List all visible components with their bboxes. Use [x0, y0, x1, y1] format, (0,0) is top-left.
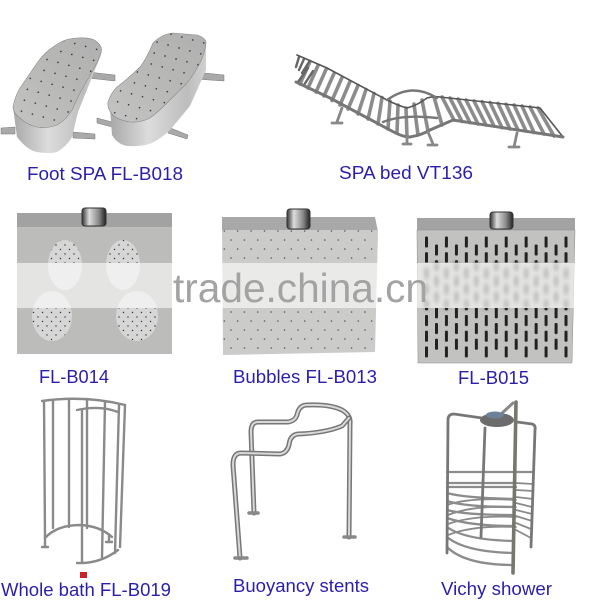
- front rings: [447, 472, 533, 565]
- panel: box FL-B015: [417, 212, 575, 363]
- shower head: [500, 403, 513, 415]
- perforated foot ovals: [32, 240, 158, 341]
- pipe: [287, 209, 310, 229]
- bed lower rail: [296, 82, 563, 137]
- panel: foot SPA: [1, 33, 224, 153]
- label: whole bath: Whole bath FL-B019: [1, 579, 171, 600]
- watermark text: trade.china.cn: [173, 265, 428, 311]
- watermark band: [0, 263, 600, 308]
- rear rings: [447, 483, 533, 538]
- box top and front: [17, 213, 172, 227]
- box top and front: [222, 217, 378, 232]
- bed arc supports: [383, 90, 437, 122]
- front tube: [233, 418, 349, 558]
- box top and front: [417, 218, 575, 230]
- red mark: [80, 572, 87, 578]
- back and front rails: [42, 399, 125, 563]
- left foot basin: [1, 38, 115, 153]
- bed upper rail: [297, 55, 563, 137]
- panel: box FL-B014: [17, 208, 172, 354]
- vertical bars: [44, 400, 125, 563]
- panel: SPA bed: [296, 55, 563, 147]
- posts and frame: [447, 414, 535, 553]
- pipe: [490, 212, 513, 229]
- label: Vichy shower: Vichy shower: [441, 578, 552, 599]
- panel: buoyancy stents: [233, 405, 355, 558]
- label: SPA bed: SPA bed VT136: [339, 162, 473, 183]
- rear tube: [251, 405, 350, 537]
- feet: [42, 535, 112, 547]
- panel: box FL-B013: [222, 209, 378, 355]
- slots: [424, 236, 570, 358]
- label: Bubbles FL-B013: Bubbles FL-B013: [233, 366, 377, 387]
- panel: Vichy shower: [447, 402, 535, 573]
- pipe: [82, 208, 106, 226]
- blurred slots under watermark: [424, 263, 570, 308]
- bed legs: [332, 108, 519, 147]
- bed slats: [296, 57, 554, 137]
- label: buoyancy stents: Buoyancy stents: [233, 575, 369, 596]
- label: FL-B015: FL-B015: [458, 367, 529, 388]
- label: FL-B014: FL-B014: [39, 366, 109, 387]
- base plates: [235, 513, 355, 558]
- label: foot SPA: Foot SPA FL-B018: [27, 163, 183, 184]
- panel: whole bath frame: [42, 399, 125, 578]
- right foot basin: [97, 33, 224, 146]
